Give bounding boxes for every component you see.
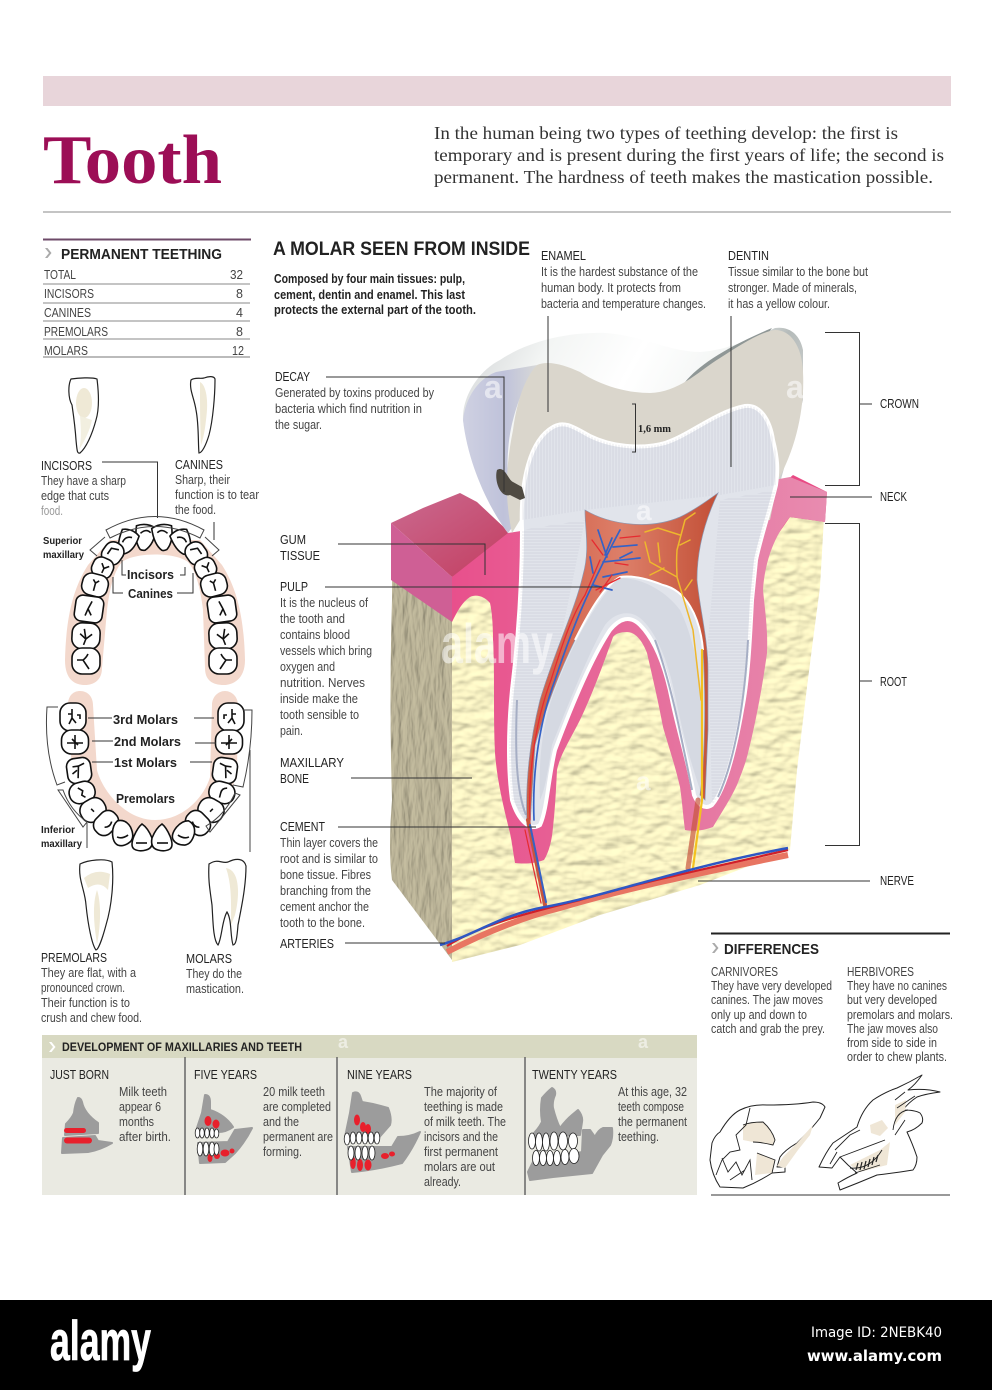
label: enamel bbox=[541, 249, 706, 412]
label: cement bbox=[280, 820, 536, 930]
arch labels: Premolars bbox=[116, 792, 175, 806]
stage: just born: JUST BORN bbox=[50, 1068, 109, 1082]
text: herbivores: premolars and molars. bbox=[847, 1008, 953, 1022]
stage: twenty years: teeth compose bbox=[618, 1100, 684, 1114]
text: incisors bbox=[41, 459, 126, 518]
white inner pulp edge bbox=[575, 577, 703, 650]
label: 1.6 mm enamel thickness: 1,6 mm bbox=[638, 424, 671, 435]
label: decay: bacteria which find nutrition in bbox=[275, 402, 422, 416]
label: crown bbox=[825, 332, 919, 486]
label: pulp: the tooth and bbox=[280, 612, 345, 626]
footer: stock credit bar: www.alamy.com bbox=[807, 1347, 942, 1365]
label: maxillary bone: BONE bbox=[280, 772, 309, 786]
stage: nine years: incisors and the bbox=[424, 1130, 498, 1144]
label: dentin bbox=[728, 249, 868, 467]
label: cement: CEMENT bbox=[280, 820, 325, 834]
icon: herbivore skull bbox=[819, 1075, 940, 1190]
stage: nine years: already. bbox=[424, 1175, 461, 1189]
arch labels: 1st Molars bbox=[114, 756, 177, 770]
bone side face bbox=[390, 527, 452, 960]
text: carnivores: only up and down to bbox=[711, 1008, 807, 1022]
label: dentin: Tissue similar to the bone but bbox=[728, 265, 868, 279]
label: decay: the sugar. bbox=[275, 418, 322, 432]
panel: permanent teething table: 8 bbox=[236, 325, 243, 339]
lower teeth bbox=[60, 703, 244, 851]
text: carnivores: canines. The jaw moves bbox=[711, 993, 823, 1007]
text: carnivores: They have very developed bbox=[711, 979, 832, 993]
text: molars: mastication. bbox=[186, 982, 244, 996]
watermarks: a bbox=[338, 1032, 349, 1052]
chart: dental arches bbox=[41, 516, 252, 852]
stage: twenty years bbox=[528, 1068, 687, 1180]
arch labels: maxillary bbox=[43, 550, 84, 561]
text: premolars: Their function is to bbox=[41, 996, 130, 1010]
label: gum tissue: TISSUE bbox=[280, 549, 320, 563]
intro text: temporary and is present during the first years of life; the second is bbox=[434, 145, 944, 165]
label: decay: DECAY bbox=[275, 370, 311, 384]
label: cement: Thin layer covers the bbox=[280, 836, 378, 850]
label: pulp bbox=[280, 580, 602, 738]
label: gum tissue: GUM bbox=[280, 533, 306, 547]
label: enamel: bacteria and temperature changes. bbox=[541, 297, 706, 311]
text: carnivores: CARNIVORES bbox=[711, 965, 778, 979]
arch labels bbox=[41, 536, 181, 850]
text: molars: MOLARS bbox=[186, 952, 232, 966]
arch connector lines bbox=[88, 560, 216, 762]
label: pulp: PULP bbox=[280, 580, 308, 594]
label: pulp: It is the nucleus of bbox=[280, 596, 368, 610]
stage: five years: forming. bbox=[263, 1145, 302, 1159]
text: incisors: edge that cuts bbox=[41, 489, 109, 503]
text: molar subheading: protects the external part of the tooth. bbox=[274, 303, 476, 317]
label: nerve: NERVE bbox=[880, 874, 914, 888]
stage: nine years: The majority of bbox=[424, 1085, 497, 1099]
label: neck bbox=[790, 490, 908, 504]
arch brackets bbox=[46, 516, 252, 852]
label: enamel: ENAMEL bbox=[541, 249, 586, 263]
label: maxillary bone: MAXILLARY bbox=[280, 756, 345, 770]
label: pulp: oxygen and bbox=[280, 660, 335, 674]
inner dentin arch between roots bbox=[540, 578, 702, 800]
icon: newborn jaw bbox=[62, 1098, 112, 1153]
panel: permanent teething table bbox=[43, 240, 251, 358]
label: pulp: contains blood bbox=[280, 628, 350, 642]
enamel cut face bbox=[507, 330, 803, 533]
label: enamel: It is the hardest substance of the bbox=[541, 265, 698, 279]
watermarks: alamy bbox=[441, 612, 553, 675]
arch labels: Inferior bbox=[41, 825, 75, 836]
pulp bbox=[527, 493, 718, 825]
stage: five years bbox=[194, 1068, 333, 1163]
label: root: ROOT bbox=[880, 675, 907, 689]
text: molar subheading: Composed by four main tissues: pulp, bbox=[274, 272, 465, 286]
panel: permanent teething table: TOTAL bbox=[44, 268, 76, 282]
stage: just born: after birth. bbox=[119, 1130, 171, 1144]
icon: chevron bbox=[45, 248, 52, 258]
illustration: molar cross-section bbox=[390, 328, 827, 962]
text: canines: function is to tear bbox=[175, 488, 259, 502]
bone front face bbox=[452, 500, 825, 962]
text: molar subheading bbox=[274, 272, 476, 317]
watermarks bbox=[338, 1032, 649, 1052]
stage: twenty years: the permanent bbox=[618, 1115, 687, 1129]
text: herbivores: order to chew plants. bbox=[847, 1050, 947, 1064]
label: decay: Generated by toxins produced by bbox=[275, 386, 435, 400]
label: pulp: tooth sensible to bbox=[280, 708, 359, 722]
stage: twenty years: TWENTY YEARS bbox=[532, 1068, 617, 1082]
watermarks: a bbox=[638, 1032, 649, 1052]
text: herbivores: They have no canines bbox=[847, 979, 947, 993]
panel: permanent teething table: 4 bbox=[236, 306, 243, 320]
stage: nine years bbox=[344, 1068, 506, 1189]
panel: permanent teething table: PREMOLARS bbox=[44, 325, 108, 339]
label: root bbox=[825, 524, 907, 846]
label: maxillary bone bbox=[280, 756, 472, 786]
arch labels: Superior bbox=[43, 536, 82, 547]
icon: premolar tooth bbox=[80, 860, 113, 950]
intro text: permanent. The hardness of teeth makes the mastication possible. bbox=[434, 167, 933, 187]
text: carnivores: catch and grab the prey. bbox=[711, 1022, 825, 1036]
text: herbivores: but very developed bbox=[847, 993, 937, 1007]
stage: nine years: molars are out bbox=[424, 1160, 495, 1174]
label: crown: CROWN bbox=[880, 397, 919, 411]
label: arteries: ARTERIES bbox=[280, 937, 334, 951]
stage: twenty years: teething. bbox=[618, 1130, 659, 1144]
icon: canine tooth bbox=[191, 377, 215, 453]
text: premolars: pronounced crown. bbox=[41, 981, 125, 995]
text: carnivores bbox=[711, 965, 832, 1036]
stage: five years: permanent are bbox=[263, 1130, 333, 1144]
cement and gum around root bbox=[452, 477, 827, 864]
watermarks: a bbox=[484, 369, 502, 405]
icon: carnivore skull bbox=[710, 1102, 825, 1188]
label: cement: root and is similar to bbox=[280, 852, 378, 866]
watermarks: a bbox=[636, 766, 651, 796]
top colour band bbox=[43, 76, 951, 106]
text: incisors: food. bbox=[41, 504, 63, 518]
arch labels: Canines bbox=[128, 587, 173, 601]
panel: permanent teething table: 12 bbox=[232, 344, 244, 358]
heading: molar from inside: A MOLAR SEEN FROM INSIDE bbox=[273, 239, 530, 260]
panel: permanent teething table: 32 bbox=[230, 268, 243, 282]
title: Tooth bbox=[43, 122, 222, 199]
arteries and nerve bbox=[440, 848, 788, 952]
stage: five years: and the bbox=[263, 1115, 299, 1129]
icon: nine-year jaw bbox=[344, 1092, 420, 1172]
stage: nine years: first permanent bbox=[424, 1145, 498, 1159]
icon: adult jaw bbox=[528, 1088, 612, 1180]
icon: chevron bbox=[712, 943, 718, 953]
text: herbivores: The jaw moves also bbox=[847, 1022, 938, 1036]
label: pulp: nutrition. Nerves bbox=[280, 676, 365, 690]
stage: five years: are completed bbox=[263, 1100, 331, 1114]
icon: chevron bbox=[49, 1042, 56, 1052]
text: herbivores: from side to side in bbox=[847, 1036, 937, 1050]
watermarks: a bbox=[636, 495, 652, 526]
blood vessels bbox=[525, 513, 702, 905]
label: dentin: it has a yellow colour. bbox=[728, 297, 830, 311]
text: premolars: They are flat, with a bbox=[41, 966, 136, 980]
icon: incisor tooth bbox=[69, 378, 98, 453]
panel: permanent teething table: INCISORS bbox=[44, 287, 94, 301]
panel: permanent teething table: 8 bbox=[236, 287, 243, 301]
stage: just born: months bbox=[119, 1115, 154, 1129]
label: pulp: pain. bbox=[280, 724, 303, 738]
stage: just born: appear 6 bbox=[119, 1100, 161, 1114]
panel: development of maxillaries and teeth: DEVELOPMENT OF MAXILLARIES AND TEETH bbox=[62, 1042, 302, 1054]
icon: five-year jaw bbox=[195, 1095, 252, 1163]
panel: differences: DIFFERENCES bbox=[724, 941, 819, 958]
stage: twenty years: At this age, 32 bbox=[618, 1085, 687, 1099]
text: premolars: PREMOLARS bbox=[41, 951, 107, 965]
stage: five years: 20 milk teeth bbox=[263, 1085, 325, 1099]
arch labels: maxillary bbox=[41, 839, 82, 850]
label: pulp: inside make the bbox=[280, 692, 358, 706]
gum block bbox=[391, 475, 827, 622]
intro text: In the human being two types of teething develop: the first is bbox=[434, 123, 898, 143]
stage: five years: FIVE YEARS bbox=[194, 1068, 257, 1082]
panel: permanent teething table: PERMANENT TEETHING bbox=[61, 246, 222, 263]
panel: permanent teething table: MOLARS bbox=[44, 344, 88, 358]
upper teeth bbox=[71, 523, 238, 674]
label: cement: bone tissue. Fibres bbox=[280, 868, 371, 882]
text: premolars bbox=[41, 951, 142, 1025]
stage: nine years: NINE YEARS bbox=[347, 1068, 412, 1082]
footer: stock credit bar: Image ID: 2NEBK40 bbox=[811, 1325, 942, 1341]
intro text bbox=[434, 123, 944, 187]
watermarks bbox=[441, 369, 804, 796]
footer: stock credit bar bbox=[0, 1300, 992, 1390]
arch labels: Incisors bbox=[127, 568, 174, 582]
text: canines bbox=[175, 458, 259, 517]
label: pulp: vessels which bring bbox=[280, 644, 372, 658]
label: cement: tooth to the bone. bbox=[280, 916, 365, 930]
label: dentin: DENTIN bbox=[728, 249, 769, 263]
label: neck: NECK bbox=[880, 490, 908, 504]
text: incisors: They have a sharp bbox=[41, 474, 126, 488]
label: cement: cement anchor the bbox=[280, 900, 369, 914]
text: canines: the food. bbox=[175, 503, 216, 517]
text: incisors: INCISORS bbox=[41, 459, 92, 473]
label: gum tissue bbox=[280, 533, 485, 575]
text: canines: Sharp, their bbox=[175, 473, 230, 487]
panel: differences bbox=[710, 934, 953, 1195]
icon: molar tooth bbox=[209, 859, 246, 945]
arch labels: 2nd Molars bbox=[114, 735, 181, 749]
arch labels: 3rd Molars bbox=[113, 713, 178, 727]
text: molars: They do the bbox=[186, 967, 242, 981]
panel: development of maxillaries and teeth bbox=[42, 1032, 697, 1195]
footer: stock credit bar: alamy bbox=[50, 1309, 151, 1372]
crown enamel exterior bbox=[463, 328, 803, 540]
label: 1.6 mm enamel thickness bbox=[632, 404, 671, 452]
stage: just born: Milk teeth bbox=[119, 1085, 167, 1099]
stage: nine years: teething is made bbox=[424, 1100, 503, 1114]
text: herbivores: HERBIVORES bbox=[847, 965, 914, 979]
text: molars bbox=[186, 952, 244, 996]
label: dentin: stronger. Made of minerals, bbox=[728, 281, 857, 295]
stage: nine years: of milk teeth. The bbox=[424, 1115, 506, 1129]
text: canines: CANINES bbox=[175, 458, 223, 472]
text: herbivores bbox=[847, 965, 953, 1064]
label: cement: branching from the bbox=[280, 884, 371, 898]
label: enamel: human body. It protects from bbox=[541, 281, 681, 295]
text: premolars: crush and chew food. bbox=[41, 1011, 142, 1025]
decay bbox=[496, 469, 525, 500]
gums bbox=[65, 540, 245, 840]
stage: just born bbox=[50, 1068, 171, 1153]
watermarks: a bbox=[786, 369, 804, 405]
panel: permanent teething table: CANINES bbox=[44, 306, 91, 320]
dentin bbox=[509, 406, 777, 827]
text: molar subheading: cement, dentin and enamel. This last bbox=[274, 288, 466, 302]
label: decay bbox=[275, 370, 504, 492]
